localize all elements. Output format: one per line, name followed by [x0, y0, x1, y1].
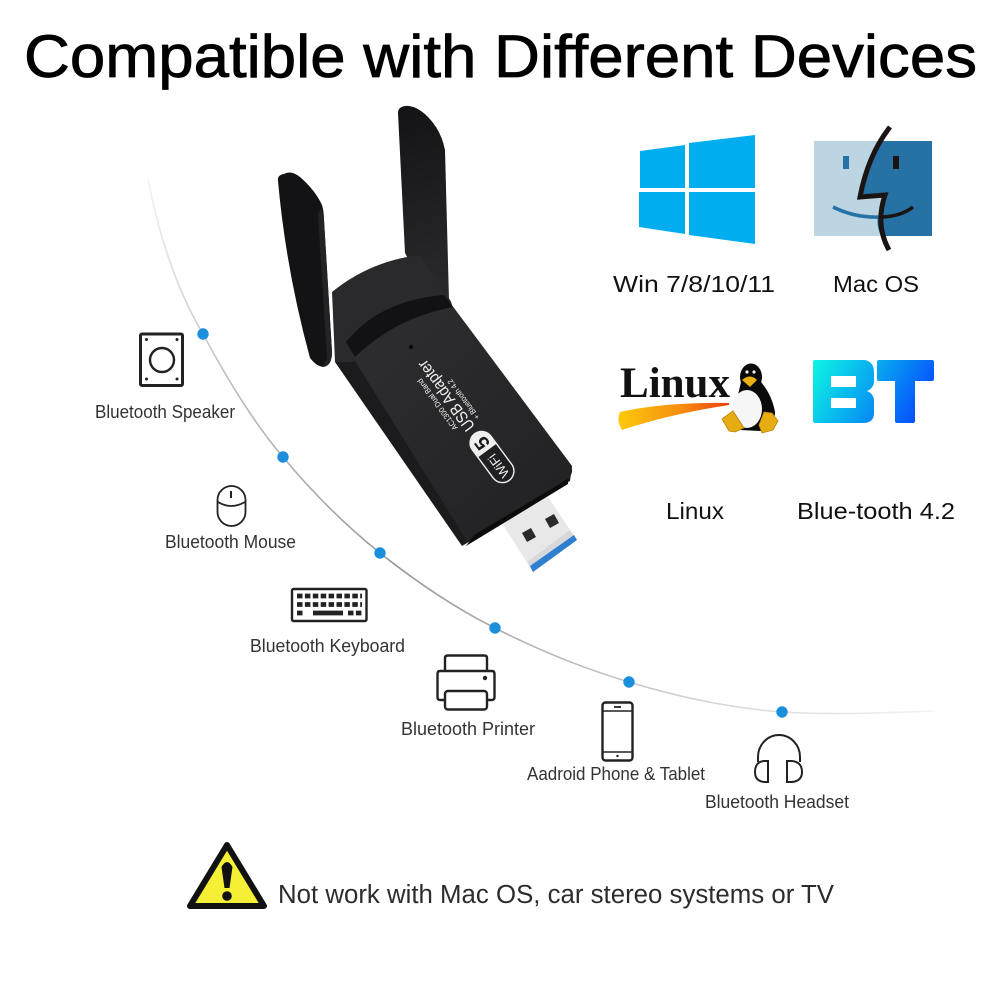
icon: phone — [602, 702, 632, 760]
device: bluetooth printer — [401, 656, 535, 739]
icon: headset — [755, 735, 802, 782]
adapter base — [332, 255, 452, 362]
device: bluetooth keyboard: Bluetooth Keyboard — [250, 636, 405, 656]
icon: mac finder logo — [814, 127, 932, 250]
right antenna — [398, 106, 449, 300]
device: bluetooth mouse — [165, 486, 296, 552]
icon: linux logo — [618, 360, 778, 433]
wifi 5 badge: 5 — [471, 432, 495, 454]
USB plug — [502, 497, 577, 572]
label: Win: Win 7/8/10/11 — [613, 271, 775, 297]
left antenna — [278, 173, 332, 367]
connection arc with device dots — [148, 180, 935, 718]
label: Linux: Linux — [666, 498, 725, 524]
device: bluetooth headset — [705, 735, 849, 812]
adapter printed text: + Bluetooth 4.2 — [446, 377, 482, 421]
penguin — [722, 364, 778, 433]
icon: mouse — [218, 486, 246, 526]
label: Mac OS: Mac OS — [833, 271, 919, 297]
wifi 5 badge — [466, 427, 519, 487]
device: bluetooth printer: Bluetooth Printer — [401, 719, 535, 739]
wifi 5 badge: WiFi — [485, 451, 512, 481]
warning text: Not work with Mac OS, car stereo systems or TV — [278, 881, 834, 909]
icon: speaker — [140, 334, 182, 386]
icon: windows logo — [639, 135, 755, 244]
icon: keyboard — [292, 589, 366, 621]
adapter body side — [335, 300, 572, 546]
adapter top surface — [352, 296, 572, 541]
icon: warning triangle — [190, 845, 264, 906]
device: bluetooth speaker — [95, 334, 235, 422]
adapter printed text: USB Adapter — [414, 356, 479, 434]
device: android phone and tablet — [527, 702, 705, 784]
device: bluetooth speaker: Bluetooth Speaker — [95, 402, 235, 422]
device: bluetooth mouse: Bluetooth Mouse — [165, 532, 296, 552]
adapter printed text: AC1300 Dual Band — [416, 377, 460, 432]
icon: BT logo — [813, 360, 934, 423]
LED dot — [409, 345, 413, 349]
adapter stripe — [346, 295, 453, 357]
title: Compatible with Different Devices — [24, 23, 977, 90]
USB socket lip — [466, 479, 568, 546]
label: Bluetooth 4.2: Blue-tooth 4.2 — [797, 498, 955, 524]
device: bluetooth headset: Bluetooth Headset — [705, 792, 849, 812]
icon: printer — [438, 656, 494, 710]
USB wifi adapter — [278, 106, 577, 572]
device: android phone and tablet: Aadroid Phone & Tablet — [527, 764, 705, 784]
device: bluetooth keyboard — [250, 589, 405, 656]
icon: linux logo: Linux — [620, 360, 730, 407]
